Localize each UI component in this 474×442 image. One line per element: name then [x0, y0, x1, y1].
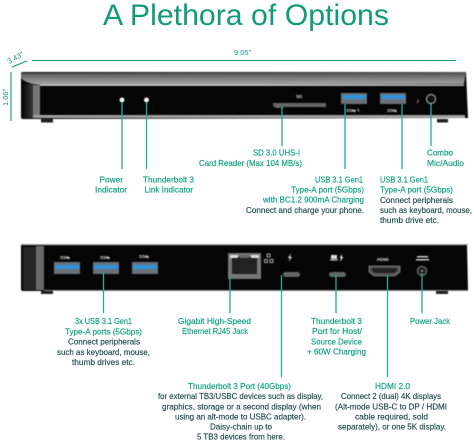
- label: rear USB ports: 3x USB 3.1 Gen1: [75, 317, 132, 326]
- dimensions: [1, 48, 456, 121]
- SD slot: [273, 94, 326, 108]
- label: host thunderbolt port: Port for Host/: [312, 327, 363, 336]
- icon: laptop thunderbolt: [330, 254, 344, 262]
- USB ports: [54, 253, 158, 274]
- label: host thunderbolt port: [307, 317, 366, 356]
- label: rear USB ports: such as keyboard, mouse,: [57, 348, 150, 357]
- label: SD card reader: SD 3.0 UHS-I: [253, 148, 300, 158]
- audio jack: [416, 94, 436, 105]
- panel: front view of dock: [21, 72, 468, 122]
- label: HDMI: [335, 382, 447, 432]
- label: thunderbolt link indicator: Thunderbolt 3: [143, 176, 194, 184]
- label: SD card reader: [199, 148, 302, 168]
- dock body: [21, 244, 468, 291]
- label: HDMI: HDMI 2.0: [375, 382, 410, 391]
- icon: thunderbolt LED: [144, 98, 149, 102]
- icon: network: [264, 254, 273, 262]
- USB port: [380, 93, 406, 114]
- label: HDMI: (Alt-mode USB-C to DP / HDMI: [335, 402, 447, 412]
- label: USB charging port: Connect and charge your phone.: [246, 206, 364, 215]
- feet: [41, 119, 448, 122]
- label: USB charging port: [246, 176, 364, 215]
- label: power indicator: [95, 176, 127, 194]
- label: USB charging port: USB 3.1 Gen1: [315, 176, 363, 184]
- label: combo audio: Combo: [427, 148, 453, 158]
- USB port with charging: SS⇆ ϟ: [346, 107, 360, 114]
- label: thunderbolt 40Gbps port: Daisy-chain up to: [210, 422, 272, 432]
- label: HDMI: Connect 2 (dual) 4K displays: [341, 392, 441, 401]
- label: ethernet: Ethernet RJ45 Jack: [182, 327, 249, 336]
- HDMI port: HDMI: [377, 257, 388, 262]
- power jack: [416, 256, 429, 276]
- USB port: SS⇆: [387, 107, 398, 114]
- height dimension: [1, 72, 11, 121]
- label: combo audio: Mic/Audio: [427, 159, 464, 168]
- panel: rear view of dock: [21, 244, 468, 294]
- width dimension: 9.05": [234, 48, 252, 57]
- HDMI port: [369, 257, 400, 276]
- feet: [41, 290, 448, 294]
- label: USB port: Type-A port (5Gbps): [380, 186, 453, 194]
- depth dimension: 3.43": [6, 50, 25, 66]
- label: HDMI: separately), or one 5K display.: [338, 422, 446, 432]
- SD slot: SD: [296, 94, 303, 99]
- label: thunderbolt 40Gbps port: Thunderbolt 3 Port (40Gbps): [188, 382, 291, 391]
- label: USB charging port: Type-A port (5Gbps): [291, 186, 364, 194]
- label: USB port: thumb drive etc.: [380, 216, 439, 225]
- height dimension: 1.06": [1, 88, 10, 106]
- ethernet port: [228, 253, 261, 279]
- USB port with charging: [341, 93, 367, 114]
- USB ports: SS⇆: [60, 254, 71, 261]
- host thunderbolt port: [329, 272, 346, 277]
- label: ethernet: [178, 317, 251, 336]
- label: host thunderbolt port: + 60W Charging: [307, 348, 366, 356]
- icon: power LED: [120, 98, 124, 102]
- label: rear USB ports: [57, 317, 150, 367]
- dock body: [21, 72, 468, 119]
- label: USB charging port: with BC1.2 900mA Charging: [262, 196, 364, 204]
- label: thunderbolt link indicator: [143, 176, 194, 194]
- label: combo audio: [427, 148, 464, 168]
- label: thunderbolt 40Gbps port: 5 TB3 devices from here.: [197, 432, 285, 442]
- icon: thunderbolt: [288, 253, 292, 262]
- label: host thunderbolt port: Thunderbolt 3: [311, 317, 362, 326]
- label: USB port: such as keyboard, mouse,: [380, 206, 472, 215]
- label: USB port: [380, 176, 472, 225]
- label: thunderbolt 40Gbps port: graphics, storage or a second display (when: [162, 402, 321, 412]
- label: ethernet: Gigabit High-Speed: [178, 317, 251, 326]
- label: HDMI: cable required, sold: [355, 412, 428, 422]
- label: rear USB ports: Type-A ports (5Gbps): [65, 328, 142, 336]
- label: rear USB ports: Connect peripherals: [68, 338, 140, 346]
- thunderbolt port: [283, 272, 300, 277]
- label: thunderbolt 40Gbps port: for external TB3/USBC devices such as display,: [158, 392, 323, 401]
- leader lines: [104, 102, 431, 377]
- label: thunderbolt link indicator: Link Indicator: [144, 186, 193, 194]
- label: rear USB ports: thumb drives etc.: [72, 358, 135, 367]
- USB ports: SS⇆: [139, 253, 150, 260]
- label: SD card reader: Card Reader (Max 104 MB/s): [199, 159, 302, 168]
- label: thunderbolt 40Gbps port: using an alt-mode to USBC adapter).: [175, 412, 306, 422]
- label: host thunderbolt port: Source Device: [311, 338, 362, 346]
- label: power indicator: Indicator: [95, 186, 127, 194]
- USB ports: SS⇆: [100, 254, 111, 261]
- label: USB port: USB 3.1 Gen1: [380, 176, 428, 184]
- audio jack: ♪: [416, 98, 420, 105]
- label: USB port: Connect peripherals: [380, 196, 453, 205]
- label: power jack: Power Jack: [410, 317, 451, 326]
- label: power indicator: Power: [100, 176, 123, 184]
- label: thunderbolt 40Gbps port: [158, 382, 323, 442]
